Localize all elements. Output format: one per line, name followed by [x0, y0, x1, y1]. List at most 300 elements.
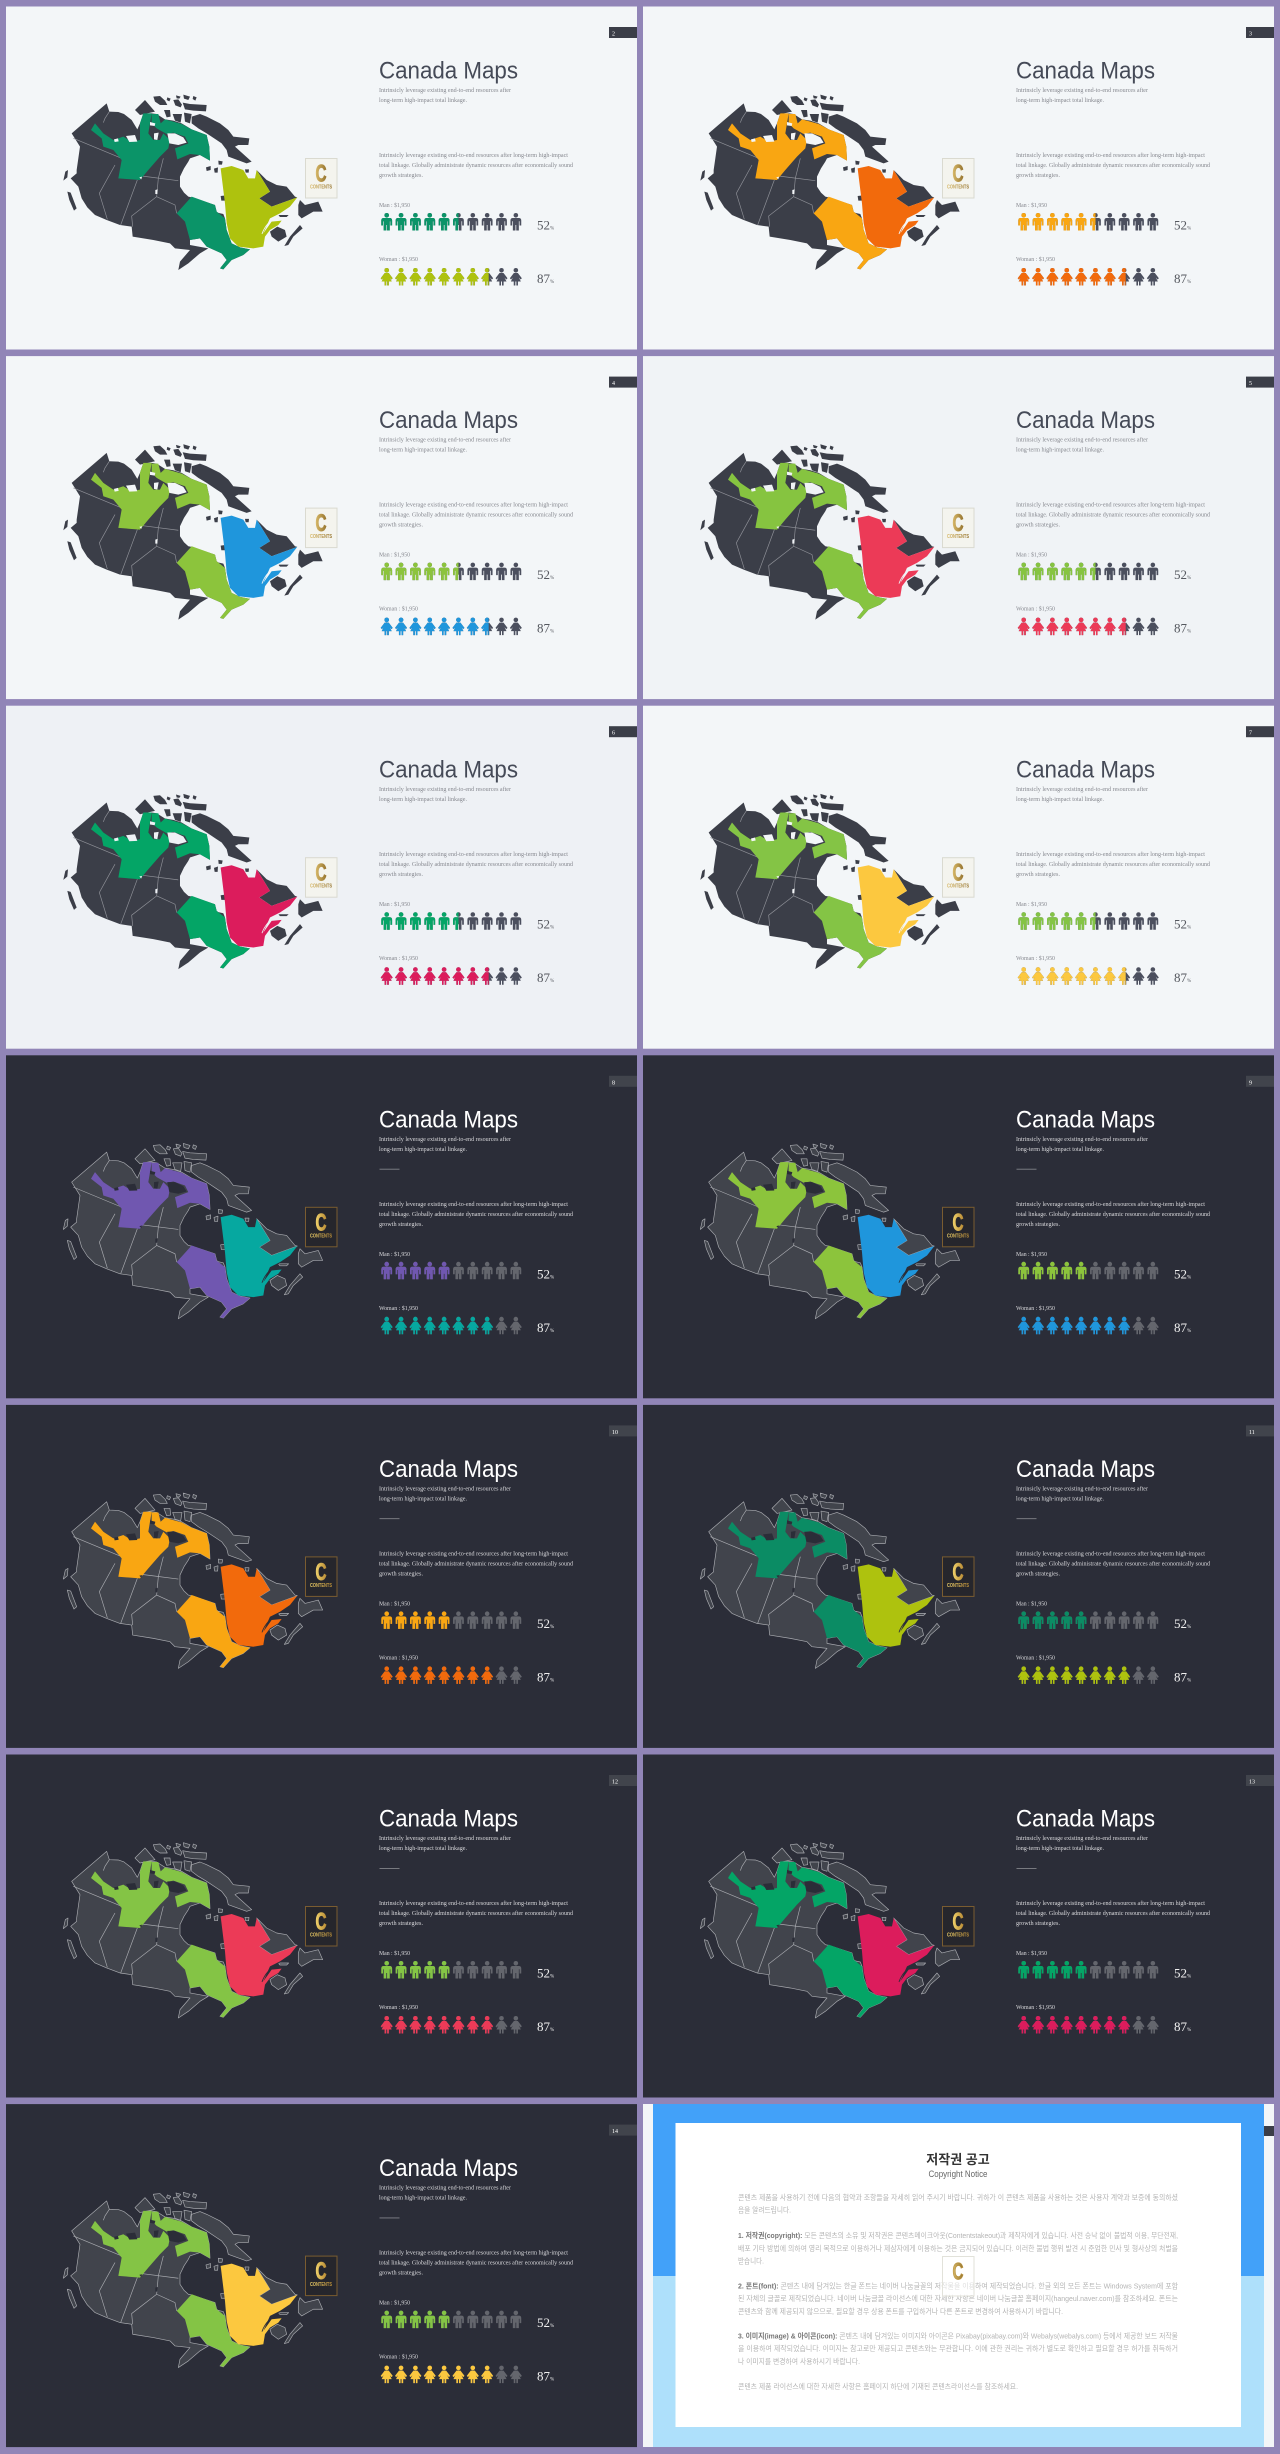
body text: total linkage. Globally administrate dynamic resources after economically sound	[1016, 512, 1210, 519]
page tag	[609, 1425, 637, 1436]
logo badge: CONTENTS	[947, 534, 970, 540]
map of Canada	[63, 444, 323, 620]
page tag: 5	[1249, 381, 1252, 387]
page tag: 4	[612, 381, 615, 387]
body text: total linkage. Globally administrate dynamic resources after economically sound	[1016, 861, 1210, 868]
woman label: Woman : $1,950	[379, 2004, 418, 2011]
woman pictogram row	[381, 967, 522, 985]
page tag	[1246, 377, 1274, 388]
woman percentage: 87%	[537, 2369, 554, 2384]
subtitle text: long-term high-impact total linkage.	[1016, 797, 1104, 803]
man label: Man : $1,950	[1016, 1950, 1047, 1957]
title: Canada Maps	[1016, 1106, 1155, 1133]
man percentage: 52%	[537, 218, 554, 232]
map of Canada	[700, 444, 960, 620]
page tag	[609, 2125, 637, 2136]
body text	[379, 502, 573, 529]
subtitle text	[379, 1136, 511, 1153]
woman label: Woman : $1,950	[1016, 2004, 1055, 2011]
page tag	[1264, 2126, 1274, 2136]
woman label: Woman : $1,950	[1016, 955, 1055, 962]
logo badge	[942, 1207, 974, 1247]
man pictogram row	[1018, 1961, 1158, 1978]
man label: Man : $1,950	[379, 1251, 410, 1258]
woman pictogram row	[381, 2366, 522, 2383]
body text: total linkage. Globally administrate dynamic resources after economically sound	[1016, 1211, 1210, 1218]
subtitle text	[379, 786, 511, 803]
intro paragraph: 콘텐츠 제품을 사용하기 전에 다음의 협약과 조항들을 자세히 읽어 주시기 바랍니다. 귀하가 이 콘텐츠 제품을 사용하는 것은 사용자 계약과 보증에 동의하셨	[738, 2193, 1178, 2202]
body text: Intrinsicly leverage existing end-to-end resources after long-term high-impact	[1016, 1201, 1205, 1208]
copyright paragraph: 받습니다.	[738, 2256, 764, 2266]
subtitle text	[1016, 786, 1148, 803]
woman pictogram row	[381, 1666, 522, 1684]
man pictogram row	[1018, 563, 1158, 580]
man percentage: 52%	[1174, 917, 1191, 932]
subtitle text: long-term high-impact total linkage.	[1016, 1846, 1104, 1852]
subtitle text: Intrinsicly leverage existing end-to-end resources after	[1016, 786, 1148, 793]
logo badge: C	[952, 860, 964, 887]
man label: Man : $1,950	[1016, 901, 1047, 908]
page tag: 7	[1249, 731, 1252, 737]
woman percentage: 87%	[1174, 271, 1191, 286]
image and icon paragraph: 나 이미지를 변경하여 사용하시기 바랍니다.	[738, 2357, 860, 2366]
logo badge: CONTENTS	[310, 184, 333, 190]
woman label: Woman : $1,950	[379, 1305, 418, 1312]
map of Canada	[63, 794, 323, 969]
woman percentage: 87%	[537, 1320, 554, 1335]
man percentage: 52%	[1174, 1966, 1191, 1980]
slide background	[6, 356, 637, 699]
title: Canada Maps	[379, 2155, 518, 2182]
subtitle text: long-term high-impact total linkage.	[379, 2196, 467, 2202]
man percentage: 52%	[1174, 218, 1191, 232]
title: Canada Maps	[1016, 757, 1155, 784]
title: Canada Maps	[1016, 1456, 1155, 1483]
woman percentage: 87%	[537, 271, 554, 286]
woman pictogram row	[1018, 2016, 1159, 2034]
subtitle text	[1016, 1835, 1148, 1852]
notice subheading: Copyright Notice	[928, 2169, 988, 2179]
font paragraph	[738, 2282, 1178, 2316]
logo badge: CONTENTS	[310, 2282, 333, 2288]
woman pictogram row	[1018, 1666, 1159, 1684]
subtitle text: Intrinsicly leverage existing end-to-end resources after	[379, 1485, 511, 1492]
panel: slide 7	[643, 706, 1274, 1049]
logo badge	[306, 1557, 337, 1596]
logo badge: CONTENTS	[310, 1233, 333, 1239]
slide background	[6, 1754, 637, 2098]
logo badge: CONTENTS	[947, 1932, 970, 1938]
woman pictogram row	[1018, 268, 1159, 286]
man percentage: 52%	[1174, 567, 1191, 582]
body text: total linkage. Globally administrate dynamic resources after economically sound	[379, 2260, 573, 2267]
man label: Man : $1,950	[379, 2300, 410, 2307]
logo badge: CONTENTS	[947, 184, 970, 190]
logo badge: CONTENTS	[947, 1233, 970, 1239]
logo badge	[306, 508, 337, 548]
subtitle text	[379, 1835, 511, 1852]
man percentage: 52%	[537, 1616, 554, 1631]
body text	[379, 1900, 573, 1927]
page tag	[609, 27, 637, 38]
body text	[1016, 502, 1210, 529]
man pictogram row	[381, 563, 521, 580]
copyright paragraph: 배포 기타 방법에 의하여 영리 목적으로 이용하거나 제삼자에게 이용하는 것은 금지되어 있습니다. 이러한 불법 행위 발견 시 준엄한 민사 및 형사상의 처벌을	[738, 2244, 1178, 2253]
subtitle text	[1016, 1485, 1148, 1502]
body text: growth strategies.	[379, 872, 424, 878]
panel: slide 11	[643, 1405, 1274, 1748]
body text: growth strategies.	[1016, 872, 1061, 878]
body text: total linkage. Globally administrate dynamic resources after economically sound	[379, 1910, 573, 1917]
man percentage: 52%	[537, 567, 554, 582]
man pictogram row	[381, 1262, 521, 1279]
logo badge: C	[952, 2258, 964, 2286]
logo badge	[942, 158, 974, 198]
subtitle text: long-term high-impact total linkage.	[1016, 1496, 1104, 1502]
logo badge	[942, 858, 974, 897]
subtitle text	[1016, 1136, 1148, 1153]
title: Canada Maps	[379, 58, 518, 84]
man label: Man : $1,950	[379, 1950, 410, 1957]
subtitle text: Intrinsicly leverage existing end-to-end resources after	[1016, 1485, 1148, 1492]
copyright paragraph	[738, 2231, 1178, 2266]
logo badge: C	[952, 510, 964, 537]
man pictogram row	[1018, 912, 1158, 930]
woman label: Woman : $1,950	[379, 1654, 418, 1661]
man percentage: 52%	[537, 2315, 554, 2330]
panel: slide 14	[6, 2104, 637, 2447]
title: Canada Maps	[379, 757, 518, 784]
woman label: Woman : $1,950	[1016, 256, 1055, 263]
slide background	[643, 1754, 1274, 2098]
page tag	[1246, 1775, 1274, 1786]
subtitle text: Intrinsicly leverage existing end-to-end resources after	[1016, 1835, 1148, 1842]
logo badge: CONTENTS	[310, 1583, 333, 1589]
logo badge: C	[316, 510, 326, 537]
subtitle text	[379, 87, 511, 104]
logo badge: C	[316, 1559, 326, 1586]
body text: total linkage. Globally administrate dynamic resources after economically sound	[379, 861, 573, 868]
body text: growth strategies.	[1016, 523, 1061, 529]
slide background	[643, 356, 1274, 699]
subtitle text: Intrinsicly leverage existing end-to-end resources after	[379, 1835, 511, 1842]
page tag	[609, 377, 637, 388]
body text: total linkage. Globally administrate dynamic resources after economically sound	[379, 162, 573, 169]
woman percentage: 87%	[537, 2019, 554, 2034]
map of Canada	[700, 794, 960, 969]
body text	[1016, 1201, 1210, 1228]
body text: growth strategies.	[379, 173, 424, 179]
body text	[379, 1201, 573, 1228]
body text	[379, 2250, 573, 2277]
body text: Intrinsicly leverage existing end-to-end resources after long-term high-impact	[379, 2250, 568, 2257]
page tag	[609, 1775, 637, 1786]
woman label: Woman : $1,950	[1016, 606, 1055, 613]
body text: total linkage. Globally administrate dynamic resources after economically sound	[1016, 162, 1210, 169]
body text	[1016, 851, 1210, 878]
logo badge	[306, 1906, 337, 1946]
man percentage: 52%	[537, 917, 554, 932]
man label: Man : $1,950	[379, 901, 410, 908]
body text: Intrinsicly leverage existing end-to-end resources after long-term high-impact	[1016, 851, 1205, 858]
woman label: Woman : $1,950	[1016, 1654, 1055, 1661]
subtitle text	[379, 1485, 511, 1502]
subtitle text: long-term high-impact total linkage.	[1016, 98, 1104, 104]
body text: Intrinsicly leverage existing end-to-end resources after long-term high-impact	[1016, 502, 1205, 509]
logo badge	[942, 508, 974, 548]
slide background	[6, 6, 637, 350]
logo badge: C	[952, 1908, 964, 1936]
map of Canada	[700, 95, 960, 270]
body text	[379, 152, 573, 179]
woman pictogram row	[381, 268, 522, 286]
subtitle text: Intrinsicly leverage existing end-to-end resources after	[379, 1136, 511, 1143]
page tag: 8	[612, 1080, 615, 1086]
body text: growth strategies.	[379, 523, 424, 529]
notice heading: 저작권 공고	[926, 2152, 990, 2167]
woman percentage: 87%	[537, 970, 554, 985]
man pictogram row	[1018, 1611, 1158, 1629]
man pictogram row	[381, 1611, 521, 1629]
page tag: 12	[612, 1780, 618, 1786]
body text: growth strategies.	[1016, 173, 1061, 179]
panel: slide 5	[643, 356, 1274, 699]
logo badge: CONTENTS	[947, 884, 970, 890]
slide background	[643, 6, 1274, 350]
body text: Intrinsicly leverage existing end-to-end resources after long-term high-impact	[379, 502, 568, 509]
page tag: 13	[1249, 1780, 1255, 1786]
subtitle text: long-term high-impact total linkage.	[379, 1846, 467, 1852]
man percentage: 52%	[1174, 1616, 1191, 1631]
man pictogram row	[1018, 213, 1158, 230]
logo badge: C	[316, 2258, 326, 2285]
page tag: 3	[1249, 32, 1252, 38]
title: Canada Maps	[1016, 1806, 1155, 1832]
woman percentage: 87%	[1174, 2019, 1191, 2034]
man pictogram row	[1018, 1262, 1158, 1279]
slide background	[6, 1055, 637, 1398]
copyright paragraph: 1. 저작권(copyright): 모든 콘텐츠의 소유 및 저작권은 콘텐츠메이크아웃(Contentstakeout)과 제작자에게 있습니다. 사전 승낙 없이 불법적 이용, 무단전재,	[738, 2231, 1178, 2240]
man pictogram row	[381, 213, 521, 230]
image and icon paragraph: 3. 이미지(image) & 아이콘(icon): 콘텐츠 내에 담겨있는 이미지와 아이콘은 Pixabay(pixabay.com)와 Webalys(webalys.com) 등에서 제공한 보드 저작물	[738, 2332, 1178, 2340]
man pictogram row	[381, 912, 521, 930]
woman percentage: 87%	[537, 1669, 554, 1684]
woman label: Woman : $1,950	[379, 606, 418, 613]
logo badge: C	[952, 160, 964, 188]
font paragraph: 된 자체의 글꼴로 제작되었습니다. 네이버 나눔글꼴 라이선스에 대한 자세한 사항은 네이버 나눔글꼴 홈페이지(hangeul.naver.com)를 참조하세요. 폰트는	[738, 2294, 1178, 2303]
image and icon paragraph: 을 이용하여 제작되었습니다. 이미지는 참고로만 제공되고 콘텐츠와는 무관합니다. 이에 관한 권리는 귀하가 별도로 확인하고 필요할 경우 허가를 취득하거	[738, 2344, 1178, 2353]
body text: total linkage. Globally administrate dynamic resources after economically sound	[379, 1560, 573, 1567]
body text	[1016, 1900, 1210, 1927]
subtitle text: Intrinsicly leverage existing end-to-end resources after	[1016, 1136, 1148, 1143]
logo badge	[306, 2256, 337, 2296]
body text: total linkage. Globally administrate dynamic resources after economically sound	[1016, 1910, 1210, 1917]
woman pictogram row	[1018, 967, 1159, 985]
subtitle text: long-term high-impact total linkage.	[1016, 1147, 1104, 1153]
map of Canada	[700, 1843, 960, 2018]
body text: Intrinsicly leverage existing end-to-end resources after long-term high-impact	[379, 1201, 568, 1208]
map of Canada	[63, 95, 323, 270]
body text: growth strategies.	[1016, 1921, 1061, 1927]
panel: slide 4	[6, 356, 637, 699]
woman label: Woman : $1,950	[1016, 1305, 1055, 1312]
page tag: 9	[1249, 1080, 1252, 1086]
body text: growth strategies.	[379, 1222, 424, 1228]
subtitle text	[379, 2185, 511, 2202]
map of Canada	[700, 1143, 960, 1319]
man label: Man : $1,950	[1016, 552, 1047, 559]
light blue lower band	[653, 2276, 1264, 2447]
logo badge: CONTENTS	[947, 1583, 970, 1589]
map of Canada	[63, 2192, 323, 2368]
logo badge: C	[316, 1908, 326, 1936]
subtitle text: long-term high-impact total linkage.	[379, 1147, 467, 1153]
page tag: 10	[612, 1430, 618, 1436]
body text: Intrinsicly leverage existing end-to-end resources after long-term high-impact	[1016, 1900, 1205, 1907]
body text: growth strategies.	[1016, 1571, 1061, 1577]
body text: total linkage. Globally administrate dynamic resources after economically sound	[1016, 1560, 1210, 1567]
slide background	[643, 2104, 1274, 2447]
page tag	[1246, 27, 1274, 38]
title: Canada Maps	[1016, 407, 1155, 434]
logo badge: CONTENTS	[310, 534, 333, 540]
panel: slide 6	[6, 706, 637, 1049]
page tag	[1246, 1425, 1274, 1436]
logo badge: C	[316, 1209, 326, 1236]
subtitle text: Intrinsicly leverage existing end-to-end resources after	[1016, 437, 1148, 444]
body text: Intrinsicly leverage existing end-to-end resources after long-term high-impact	[1016, 152, 1205, 159]
blue upper band	[653, 2104, 1264, 2276]
subtitle text	[1016, 87, 1148, 104]
logo badge: CONTENTS	[310, 884, 333, 890]
body text	[379, 1550, 573, 1577]
subtitle text: Intrinsicly leverage existing end-to-end resources after	[379, 2185, 511, 2192]
woman pictogram row	[1018, 618, 1159, 635]
font paragraph: 콘텐츠와 함께 제공되지 않으므로, 필요할 경우 상용 폰트를 구입하거나 다른 폰트로 변경하여 사용하시기 바랍니다.	[738, 2307, 1063, 2316]
body text	[1016, 1550, 1210, 1577]
slide background	[6, 1405, 637, 1748]
panel: slide 10	[6, 1405, 637, 1748]
slide background	[643, 1055, 1274, 1398]
slide background	[6, 706, 637, 1049]
subtitle text: Intrinsicly leverage existing end-to-end resources after	[379, 437, 511, 444]
body text: growth strategies.	[379, 1921, 424, 1927]
page tag: 11	[1249, 1430, 1255, 1436]
woman percentage: 87%	[1174, 1320, 1191, 1335]
body text: growth strategies.	[1016, 1222, 1061, 1228]
body text: Intrinsicly leverage existing end-to-end resources after long-term high-impact	[379, 851, 568, 858]
body text	[379, 851, 573, 878]
body text: Intrinsicly leverage existing end-to-end resources after long-term high-impact	[1016, 1550, 1205, 1557]
logo badge: CONTENTS	[310, 1932, 333, 1938]
logo badge	[942, 1557, 974, 1596]
map of Canada	[700, 1493, 960, 1668]
woman pictogram row	[381, 618, 522, 635]
woman pictogram row	[1018, 1317, 1159, 1334]
title: Canada Maps	[379, 407, 518, 434]
woman percentage: 87%	[537, 621, 554, 636]
page tag: 14	[612, 2129, 618, 2135]
woman percentage: 87%	[1174, 970, 1191, 985]
logo badge	[306, 858, 337, 897]
title: Canada Maps	[1016, 58, 1155, 84]
subtitle text: long-term high-impact total linkage.	[1016, 448, 1104, 454]
subtitle text: Intrinsicly leverage existing end-to-end resources after	[379, 87, 511, 94]
logo badge: C	[316, 160, 326, 188]
font paragraph: 2. 폰트(font): 콘텐츠 내에 담겨있는 한글 폰트는 네이버 나눔글꼴의 저작물을 이용하여 제작되었습니다. 한글 외의 모든 폰트는 Windows System에 포함	[738, 2282, 1178, 2290]
intro paragraph	[738, 2193, 1178, 2214]
body text	[1016, 152, 1210, 179]
logo badge	[942, 1906, 974, 1946]
body text: Intrinsicly leverage existing end-to-end resources after long-term high-impact	[379, 1900, 568, 1907]
subtitle text: Intrinsicly leverage existing end-to-end resources after	[1016, 87, 1148, 94]
panel: slide 8	[6, 1055, 637, 1398]
body text: growth strategies.	[379, 2271, 424, 2277]
woman label: Woman : $1,950	[379, 955, 418, 962]
man label: Man : $1,950	[1016, 1600, 1047, 1607]
body text: Intrinsicly leverage existing end-to-end resources after long-term high-impact	[379, 1550, 568, 1557]
woman pictogram row	[381, 2016, 522, 2034]
panel: slide 13	[643, 1754, 1274, 2098]
man percentage: 52%	[1174, 1266, 1191, 1281]
title: Canada Maps	[379, 1806, 518, 1832]
map of Canada	[63, 1843, 323, 2018]
slide background	[6, 2104, 637, 2447]
subtitle text: long-term high-impact total linkage.	[379, 98, 467, 104]
slide background	[643, 1405, 1274, 1748]
page tag: 6	[612, 731, 615, 737]
title: Canada Maps	[379, 1106, 518, 1133]
logo badge: C	[316, 860, 326, 887]
body text: Intrinsicly leverage existing end-to-end resources after long-term high-impact	[379, 152, 568, 159]
panel: slide 2	[6, 6, 637, 350]
subtitle text: long-term high-impact total linkage.	[379, 1496, 467, 1502]
woman percentage: 87%	[1174, 1669, 1191, 1684]
title: Canada Maps	[379, 1456, 518, 1483]
panel: slide 9	[643, 1055, 1274, 1398]
page tag: 2	[612, 32, 615, 38]
closing paragraph: 콘텐츠 제품 라이선스에 대한 자세한 사항은 홈페이지 하단에 기재된 콘텐츠라이선스를 참조하세요.	[738, 2382, 1018, 2391]
panel: copyright notice	[643, 2104, 1274, 2447]
slide background	[643, 706, 1274, 1049]
logo badge: C	[952, 1559, 964, 1586]
page tag	[1246, 1076, 1274, 1087]
image and icon paragraph	[738, 2332, 1178, 2366]
body text: growth strategies.	[379, 1571, 424, 1577]
panel: slide 3	[643, 6, 1274, 350]
panel: slide 12	[6, 1754, 637, 2098]
map of Canada	[63, 1143, 323, 1319]
man label: Man : $1,950	[379, 202, 410, 209]
man pictogram row	[381, 1961, 521, 1978]
man pictogram row	[381, 2311, 521, 2328]
subtitle text	[379, 437, 511, 454]
woman percentage: 87%	[1174, 621, 1191, 636]
intro paragraph: 음을 알려드립니다.	[738, 2206, 791, 2214]
logo badge: C	[952, 1209, 964, 1236]
page tag	[609, 1076, 637, 1087]
body text: total linkage. Globally administrate dynamic resources after economically sound	[379, 512, 573, 519]
logo badge	[306, 1207, 337, 1247]
logo badge	[942, 2256, 974, 2296]
map of Canada	[63, 1493, 323, 1668]
man percentage: 52%	[537, 1966, 554, 1980]
body text: total linkage. Globally administrate dynamic resources after economically sound	[379, 1211, 573, 1218]
man label: Man : $1,950	[379, 552, 410, 559]
subtitle text: long-term high-impact total linkage.	[379, 448, 467, 454]
page tag	[609, 726, 637, 737]
page tag	[1246, 726, 1274, 737]
